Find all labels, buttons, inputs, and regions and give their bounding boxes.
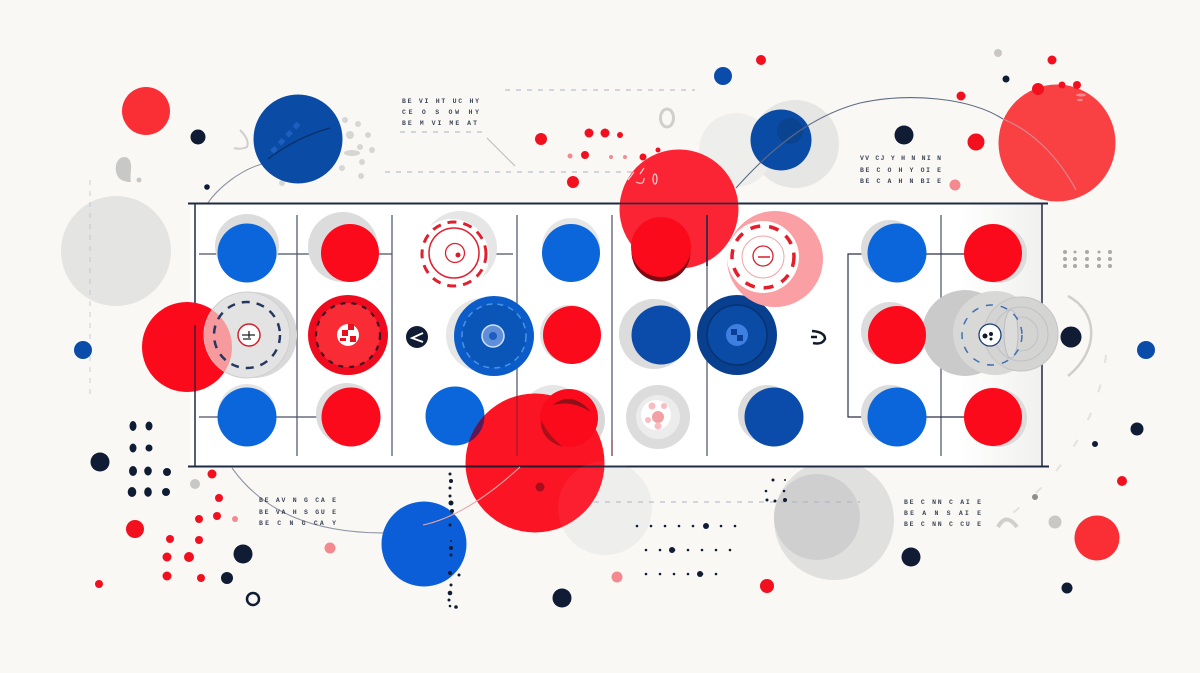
- grid lines: [199, 215, 965, 456]
- table lines over large red: [517, 396, 612, 456]
- node: blue ring target: [454, 296, 534, 376]
- pale grey blob bottom centre: [558, 461, 652, 555]
- dark blue circle top right: [750, 110, 812, 170]
- blue circle bottom: [382, 502, 466, 586]
- text block: bottom right: BE C NN C CU E: [904, 521, 981, 528]
- text block: bottom left: BE AV N G CA E: [259, 497, 336, 504]
- dotted rows bottom: [637, 526, 736, 574]
- grey small marks: [116, 49, 1062, 528]
- blue dots: [74, 67, 1155, 359]
- text block: top left: CE O S OW HY: [402, 109, 479, 116]
- bottom frame over large red: [465, 466, 605, 468]
- large grey circle left: [61, 196, 171, 306]
- text block: top right: BE C O H Y OI E: [860, 167, 941, 174]
- icon: small navy glyph: [811, 331, 825, 344]
- blue and red overlap sliver: [468, 415, 484, 442]
- dashed guide lines: [90, 90, 860, 502]
- speckled grey cluster: [279, 117, 375, 186]
- large red circle left: [142, 302, 232, 392]
- coral circle lower right: [1074, 516, 1120, 560]
- pale tint on red: [558, 461, 652, 555]
- dark blue circle top left: [254, 94, 342, 184]
- row 3 nodes: [218, 388, 276, 446]
- table frame segment over large red: [194, 325, 196, 392]
- small dark centre dot: [536, 482, 544, 492]
- arc across blue circle: [736, 98, 1003, 188]
- red dots lower left: [95, 470, 1127, 593]
- node: grey ring target: [204, 292, 297, 378]
- large red circle bottom centre: [466, 394, 604, 532]
- fading dashed curve right: [1010, 355, 1106, 515]
- faded red dots: [232, 94, 1086, 582]
- pale grey circle top: [699, 113, 773, 187]
- text block: top left: BE M VI ME AT: [402, 120, 477, 127]
- grey shadows behind nodes: [215, 212, 1027, 450]
- red node over large red: [540, 389, 598, 447]
- red dots top: [535, 55, 1081, 188]
- navy ring doodle: [247, 593, 259, 605]
- large red circle top centre: [620, 150, 738, 268]
- overlapping grey circles bottom right: [774, 460, 894, 580]
- darker grey dot: [1032, 494, 1038, 500]
- connector arcs: [207, 138, 1091, 533]
- node: navy ring target: [697, 295, 777, 375]
- icon: navy arrow badge: [406, 326, 428, 348]
- node: red ring target: [308, 295, 388, 375]
- dotted grid grey: [1063, 250, 1112, 268]
- text block: top left: BE VI HT UC HY: [402, 98, 479, 105]
- navy dot grid: [128, 421, 171, 497]
- large grey circle top right: [751, 100, 839, 188]
- right node columns: [868, 224, 926, 282]
- dark crescent under red node: [632, 222, 690, 282]
- panel: matrix table: [142, 204, 1058, 466]
- row 1 nodes: [218, 224, 276, 282]
- text block: top right: VV CJ Y H N NI N: [860, 155, 941, 162]
- red circle upper left: [122, 87, 170, 135]
- navy dots: [90, 76, 1144, 608]
- arc over blue and red circles: [423, 467, 520, 525]
- node: red target with pink halo: [727, 211, 823, 307]
- right edge shading: [960, 204, 1042, 466]
- table frame: [188, 204, 1049, 466]
- text block: bottom left: BE C N G CA Y: [259, 520, 336, 527]
- text block: top right: BE C A H N BI E: [860, 178, 941, 185]
- text block: top right: [860, 155, 941, 185]
- text block: bottom right: BE C NN C AI E: [904, 499, 981, 506]
- text block: bottom left: BE VA H S GU E: [259, 509, 336, 516]
- white flecks on red circle: [628, 168, 657, 184]
- emphasised dots: [669, 478, 787, 577]
- vertical dotted column: [448, 472, 460, 609]
- text block: bottom right: [904, 499, 981, 528]
- overlap red node top: [631, 217, 691, 277]
- node: red target top: [415, 211, 497, 293]
- table lines over large red: [620, 204, 738, 266]
- node: grey ring target right: [922, 290, 1058, 376]
- text block: bottom left: [259, 497, 336, 527]
- grey ring doodles: [234, 109, 1017, 527]
- node: pale red mini target: [626, 385, 690, 449]
- text block: top left: [402, 98, 479, 127]
- coral circle top right: [998, 84, 1116, 202]
- text block: bottom right: BE A N S AI E: [904, 510, 981, 517]
